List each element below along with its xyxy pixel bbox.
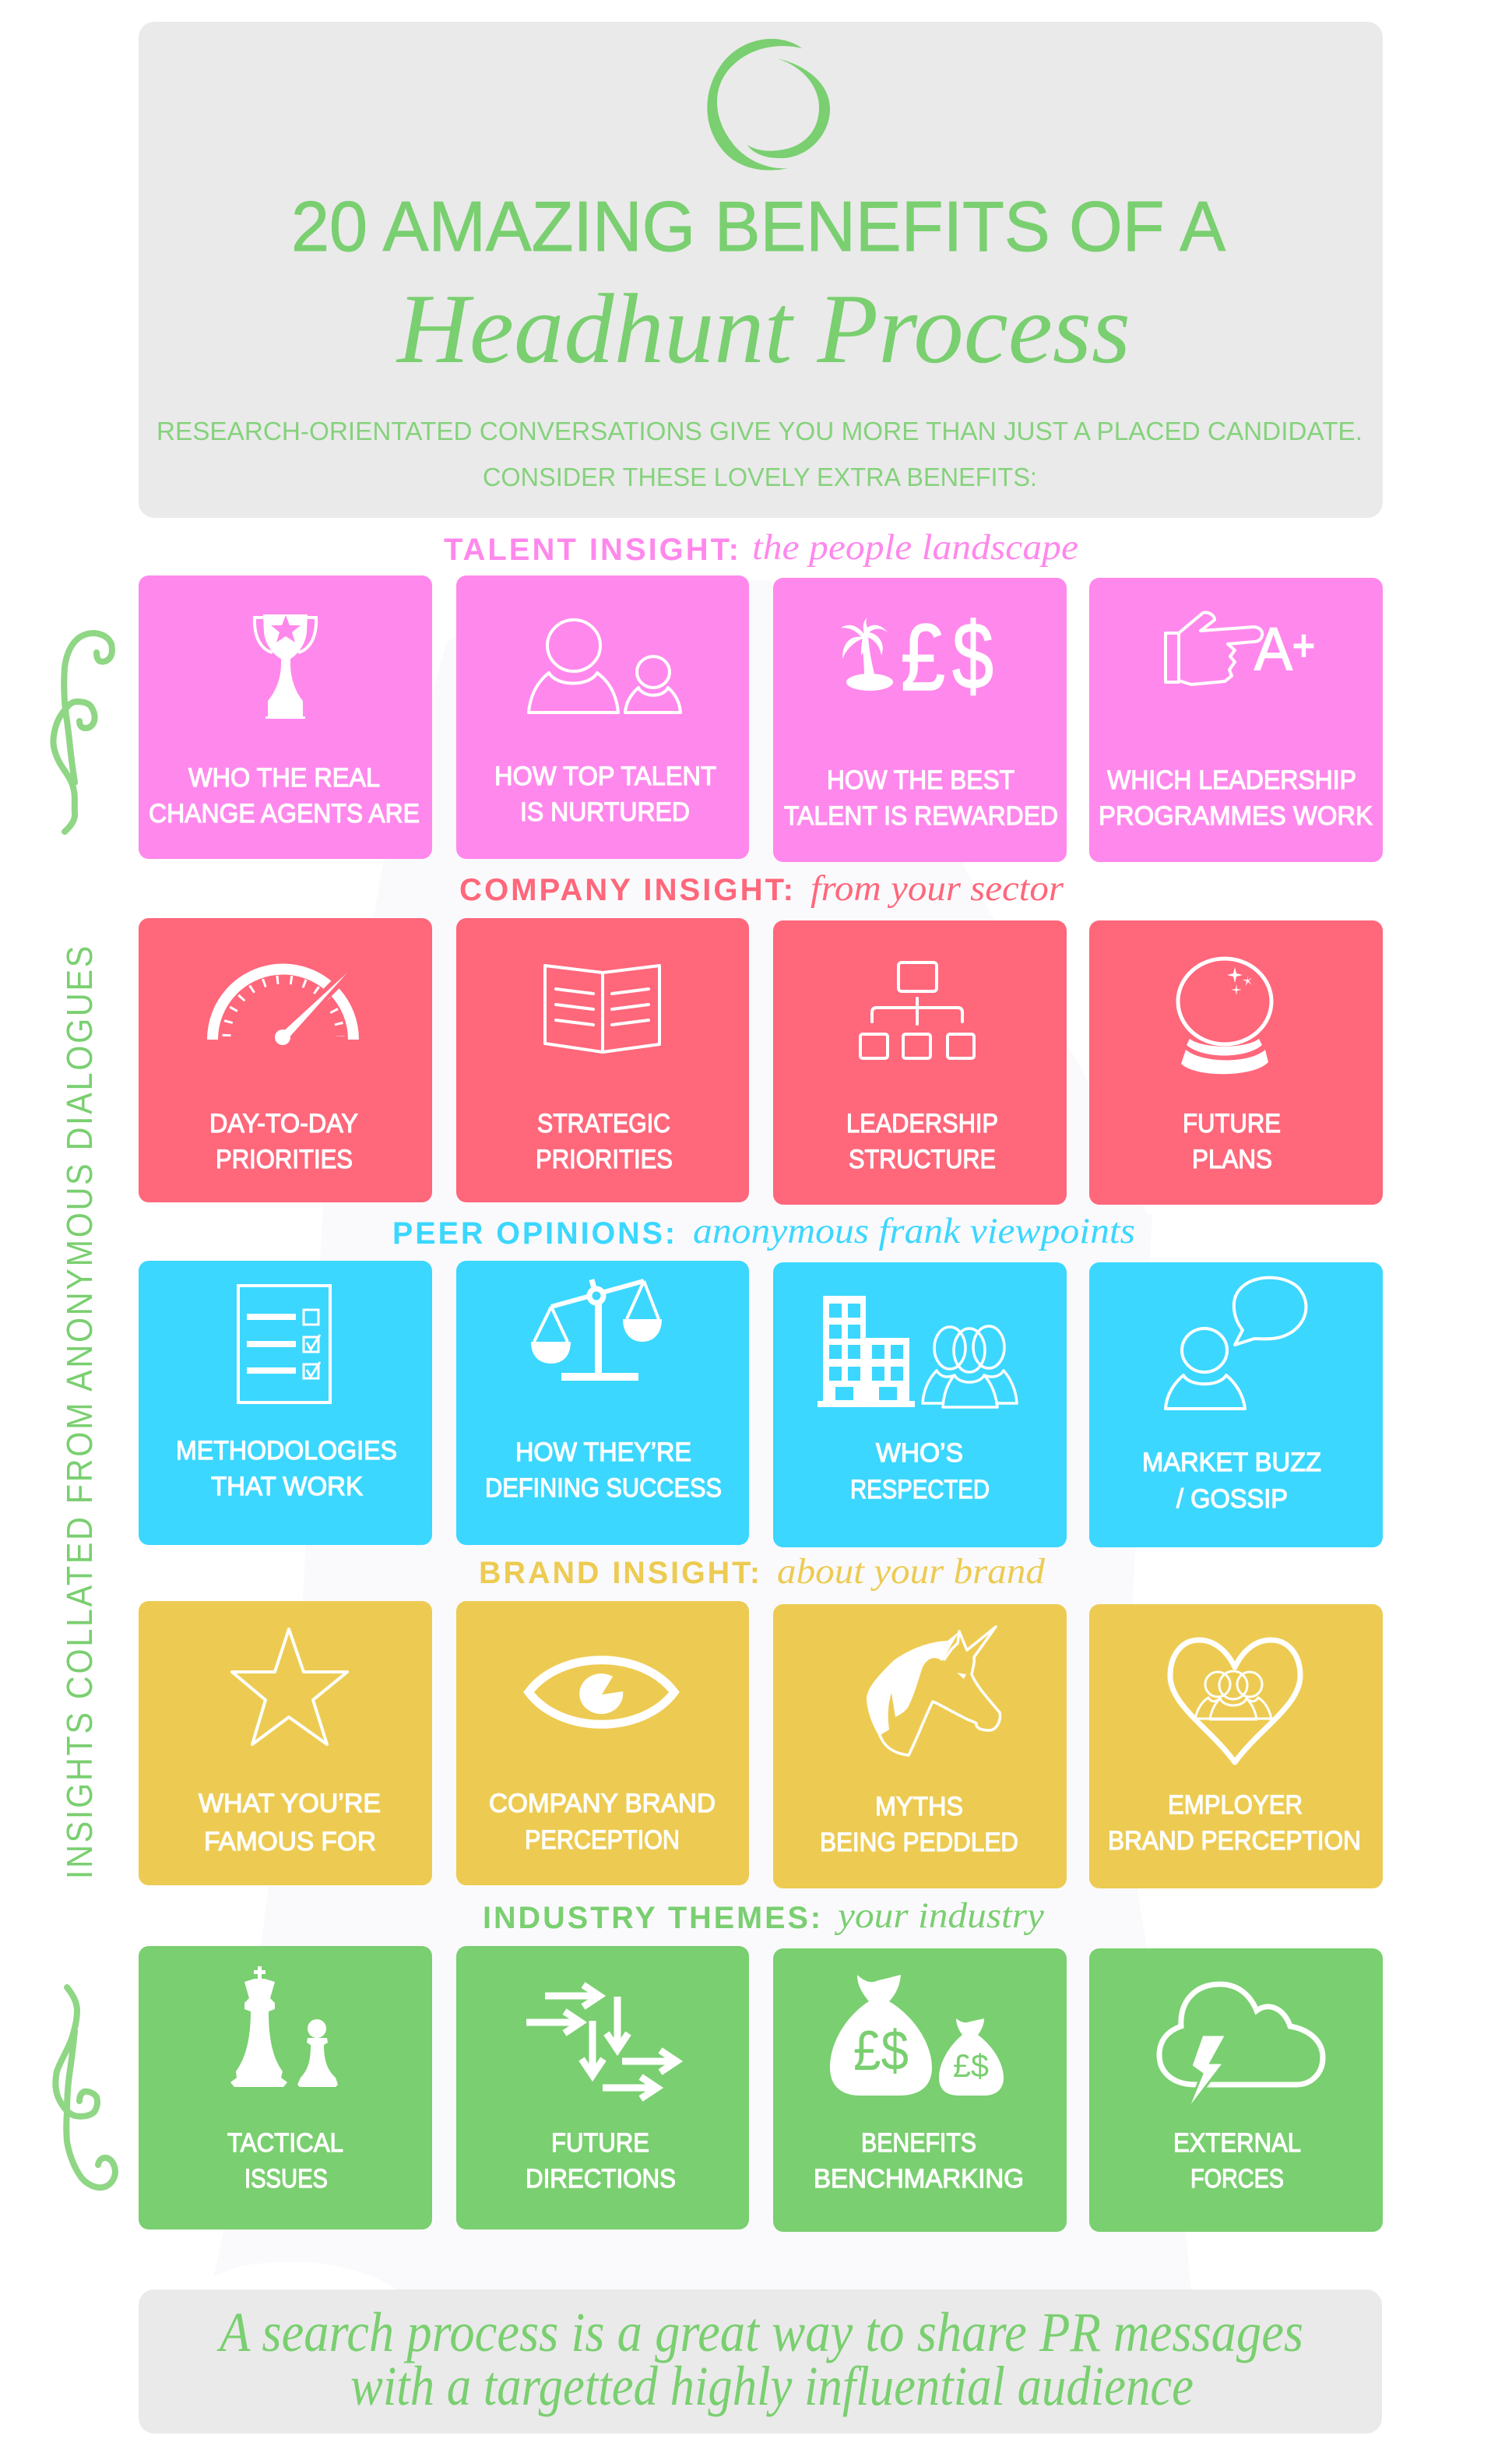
label: FUTURE bbox=[551, 2128, 649, 2158]
icon: trophy bbox=[255, 614, 316, 719]
heading: brand insight: about your brand bbox=[777, 1551, 1046, 1592]
label: METHODOLOGIES bbox=[176, 1436, 397, 1466]
label bbox=[209, 1109, 358, 1174]
label bbox=[149, 763, 420, 829]
icon: speedometer bbox=[213, 969, 353, 1045]
card: external forces bbox=[1089, 1948, 1383, 2232]
label: EXTERNAL bbox=[1173, 2128, 1301, 2158]
card: tactical issues bbox=[139, 1946, 432, 2229]
title bbox=[291, 188, 1225, 384]
label: / GOSSIP bbox=[1176, 1484, 1288, 1514]
heading: industry themes bbox=[483, 1895, 1044, 1936]
card: day-to-day priorities bbox=[139, 918, 432, 1202]
label: PERCEPTION bbox=[525, 1825, 680, 1855]
icon: checklist bbox=[238, 1286, 330, 1402]
card: how they're defining success bbox=[456, 1261, 749, 1545]
label: COMPANY BRAND bbox=[489, 1789, 716, 1818]
label bbox=[1142, 1448, 1321, 1514]
icon: unicorn bbox=[867, 1627, 1000, 1755]
panel: peer opinions bbox=[139, 1211, 1383, 1547]
label: TACTICAL bbox=[227, 2128, 343, 2158]
icon: palm island and currency bbox=[841, 603, 993, 710]
card: employer brand perception bbox=[1089, 1604, 1383, 1888]
label bbox=[494, 762, 716, 827]
icon: pointing hand and A plus bbox=[1166, 613, 1315, 685]
label: MYTHS bbox=[875, 1792, 963, 1821]
heading: company insight: from your sector bbox=[811, 868, 1064, 909]
card: future directions bbox=[456, 1946, 749, 2229]
heading: peer opinions: anonymous frank viewpoints bbox=[693, 1211, 1135, 1251]
label bbox=[536, 1109, 673, 1174]
icon: eye bbox=[529, 1660, 674, 1724]
icon: office building and group bbox=[818, 1296, 1017, 1407]
icon: star bbox=[232, 1629, 347, 1744]
label bbox=[485, 1438, 722, 1503]
flourish: bottom bbox=[55, 1987, 115, 2187]
heading: company insight bbox=[459, 868, 1064, 909]
panel: brand insight bbox=[139, 1551, 1383, 1888]
label: HOW THE BEST bbox=[827, 765, 1014, 795]
label: STRATEGIC bbox=[537, 1109, 670, 1138]
panel: header bbox=[139, 22, 1383, 518]
intro text: RESEARCH-ORIENTATED CONVERSATIONS GIVE YOU MORE THAN JUST A PLACED CANDIDATE. bbox=[156, 417, 1363, 445]
icon: money bags: £$ bbox=[953, 2047, 989, 2084]
title: 20 AMAZING BENEFITS OF A bbox=[291, 188, 1225, 266]
label bbox=[1173, 2128, 1301, 2194]
label bbox=[784, 765, 1058, 831]
label: DAY-TO-DAY bbox=[209, 1109, 358, 1138]
label: WHAT YOU’RE bbox=[199, 1789, 381, 1818]
icon: money bags bbox=[830, 1975, 1004, 2096]
label: ISSUES bbox=[244, 2164, 328, 2194]
flourish: top bbox=[53, 633, 112, 832]
title: Headhunt Process bbox=[396, 273, 1130, 384]
heading: brand insight bbox=[479, 1551, 1046, 1592]
icon: heart with group bbox=[1170, 1640, 1300, 1762]
closing text: A search process is a great way to share PR messages bbox=[216, 2301, 1303, 2363]
side caption: INSIGHTS COLLATED FROM ANONYMOUS DIALOGUES bbox=[59, 944, 100, 1879]
heading: peer opinions: PEER OPINIONS: bbox=[392, 1216, 677, 1251]
heading: talent insight bbox=[444, 527, 1078, 568]
label: PRIORITIES bbox=[216, 1145, 353, 1174]
label bbox=[526, 2128, 676, 2194]
card: market buzz / gossip bbox=[1089, 1262, 1383, 1547]
label bbox=[850, 1438, 990, 1505]
label: RESPECTED bbox=[850, 1475, 990, 1505]
card: how the best talent is rewarded bbox=[773, 578, 1067, 862]
heading: talent insight: TALENT INSIGHT: bbox=[444, 533, 741, 567]
icon: chess king and pawn bbox=[230, 1966, 338, 2087]
label: LEADERSHIP bbox=[846, 1109, 998, 1138]
icon: org chart bbox=[860, 963, 974, 1058]
label: FAMOUS FOR bbox=[204, 1827, 376, 1856]
icon: money bags: £$ bbox=[853, 2020, 909, 2082]
label bbox=[1108, 1790, 1361, 1856]
label: FUTURE bbox=[1183, 1109, 1281, 1138]
icon: person with speech bubble bbox=[1166, 1278, 1306, 1409]
label: HOW TOP TALENT bbox=[494, 762, 716, 791]
label bbox=[199, 1789, 381, 1856]
label bbox=[1099, 765, 1373, 831]
label: BEING PEDDLED bbox=[820, 1828, 1018, 1857]
card: which leadership programmes work bbox=[1089, 578, 1383, 862]
icon: direction arrows bbox=[526, 1985, 677, 2099]
card: how top talent is nurtured bbox=[456, 575, 749, 859]
label bbox=[1183, 1109, 1281, 1174]
card: methodologies that work bbox=[139, 1261, 432, 1545]
heading: talent insight: the people landscape bbox=[752, 527, 1078, 568]
label: BENEFITS bbox=[861, 2128, 976, 2158]
icon: pointing hand and A plus: + bbox=[1292, 621, 1315, 670]
label: HOW THEY’RE bbox=[515, 1438, 691, 1467]
icon: pointing hand and A plus: A bbox=[1254, 614, 1292, 683]
card: who's respected bbox=[773, 1262, 1067, 1547]
label: PRIORITIES bbox=[536, 1145, 673, 1174]
card: myths being peddled bbox=[773, 1604, 1067, 1888]
panel: talent insight bbox=[139, 527, 1383, 862]
panel: company insight bbox=[139, 868, 1383, 1205]
card: company brand perception bbox=[456, 1601, 749, 1885]
icon: palm island and currency: $ bbox=[952, 603, 993, 709]
icon: palm island and currency: £ bbox=[901, 604, 945, 710]
panel: industry themes bbox=[139, 1895, 1383, 2232]
label: DEFINING SUCCESS bbox=[485, 1473, 722, 1503]
label: EMPLOYER bbox=[1168, 1790, 1303, 1820]
icon: circular logo bbox=[707, 39, 830, 171]
panel: closing message bbox=[139, 2289, 1382, 2434]
card: leadership structure bbox=[773, 920, 1067, 1205]
label bbox=[176, 1436, 397, 1501]
card: benefits benchmarking bbox=[773, 1948, 1067, 2232]
label bbox=[846, 1109, 998, 1174]
intro text: CONSIDER THESE LOVELY EXTRA BENEFITS: bbox=[483, 463, 1037, 491]
label: WHO THE REAL bbox=[188, 763, 380, 793]
label: PLANS bbox=[1192, 1145, 1272, 1174]
label: PROGRAMMES WORK bbox=[1099, 801, 1373, 831]
icon: crystal ball bbox=[1178, 959, 1271, 1074]
card: future plans bbox=[1089, 920, 1383, 1205]
icon: storm cloud bbox=[1159, 1984, 1323, 2112]
label bbox=[820, 1792, 1018, 1857]
label: MARKET BUZZ bbox=[1142, 1448, 1321, 1477]
heading: peer opinions bbox=[392, 1211, 1135, 1251]
heading: industry themes: your industry bbox=[835, 1895, 1044, 1936]
icon: two people bbox=[529, 620, 680, 713]
label: IS NURTURED bbox=[520, 797, 690, 827]
label bbox=[814, 2128, 1024, 2194]
label bbox=[227, 2128, 343, 2194]
card: who the real change agents are bbox=[139, 575, 432, 859]
icon: balance scales bbox=[531, 1279, 662, 1381]
intro text bbox=[156, 417, 1363, 491]
label: TALENT IS REWARDED bbox=[784, 801, 1058, 831]
heading: company insight: COMPANY INSIGHT: bbox=[459, 873, 796, 907]
heading: brand insight: BRAND INSIGHT: bbox=[479, 1556, 762, 1590]
label: STRUCTURE bbox=[849, 1145, 996, 1174]
label: WHO’S bbox=[876, 1438, 963, 1468]
closing text: with a targetted highly influential audience bbox=[350, 2355, 1194, 2417]
icon: open book bbox=[545, 966, 659, 1052]
label: DIRECTIONS bbox=[526, 2164, 676, 2194]
label: CHANGE AGENTS ARE bbox=[149, 799, 420, 829]
card: strategic priorities bbox=[456, 918, 749, 1202]
label: WHICH LEADERSHIP bbox=[1107, 765, 1356, 795]
label: BRAND PERCEPTION bbox=[1108, 1826, 1361, 1856]
heading: industry themes: INDUSTRY THEMES: bbox=[483, 1901, 823, 1935]
label bbox=[489, 1789, 716, 1855]
closing text bbox=[216, 2301, 1303, 2417]
card: what you're famous for bbox=[139, 1601, 432, 1885]
label: BENCHMARKING bbox=[814, 2164, 1024, 2194]
label: THAT WORK bbox=[211, 1472, 363, 1501]
label: FORCES bbox=[1190, 2164, 1284, 2194]
